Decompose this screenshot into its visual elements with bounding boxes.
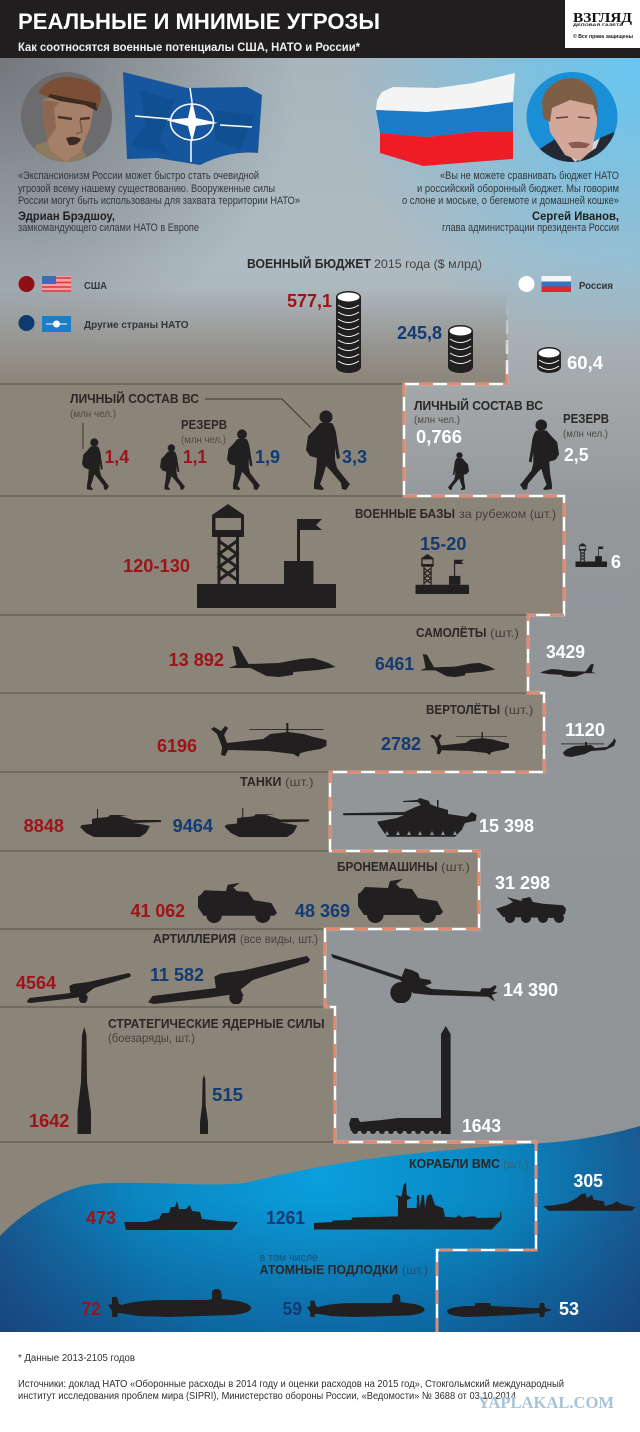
- icon: howitzer Russia: [331, 954, 498, 1003]
- logo: Vzglyad: © Все права защищены: [573, 33, 633, 40]
- icon: ship Russia: [543, 1193, 635, 1211]
- icon: missile NATO: [200, 1075, 208, 1134]
- heading: ships: (шт.): [503, 1157, 529, 1171]
- value: 0,766: 0,766: [416, 427, 462, 447]
- value: 41 062: 41 062: [131, 901, 185, 921]
- quote: Ivanov: [402, 170, 619, 234]
- value: 3429: 3429: [546, 642, 585, 662]
- icon: ship USA: [124, 1201, 238, 1230]
- icon: helicopter USA: [211, 723, 326, 757]
- value: 1,4: 1,4: [104, 447, 129, 467]
- heading: nuclear: СТРАТЕГИЧЕСКИЕ ЯДЕРНЫЕ СИЛЫ: [108, 1017, 324, 1031]
- quote: Bradshaw: Эдриан Брэдшоу,: [18, 209, 115, 223]
- value: 515: 515: [212, 1085, 243, 1105]
- heading: aircraft: САМОЛЁТЫ: [416, 625, 486, 640]
- value: 48 369: 48 369: [295, 901, 350, 921]
- heading: armored vehicles: (шт.): [441, 860, 470, 874]
- heading: Russia reserve: [563, 412, 609, 440]
- heading: submarines: АТОМНЫЕ ПОДЛОДКИ: [260, 1263, 398, 1277]
- icon: base USA: [197, 504, 336, 608]
- value: 1,9: 1,9: [255, 447, 280, 467]
- icon: helicopter NATO: [430, 732, 509, 755]
- value: 13 892: 13 892: [168, 650, 224, 670]
- heading: nuclear: (боезаряды, шт.): [108, 1031, 195, 1045]
- heading: military budget: ВОЕННЫЙ БЮДЖЕТ: [247, 256, 371, 271]
- icon: soldier NATO personnel: [306, 410, 350, 490]
- heading: Russia personnel: [414, 398, 543, 426]
- water: [0, 1126, 640, 1332]
- panel: navy ships: [86, 1157, 635, 1230]
- panel: helicopters: [157, 702, 616, 757]
- value: 59: 59: [282, 1299, 302, 1319]
- value: 1643: 1643: [462, 1116, 501, 1136]
- legend: USA: [18, 276, 107, 292]
- icon: soldier NATO reserve: [227, 429, 260, 490]
- panel: military bases: [123, 504, 621, 608]
- heading: bases: ВОЕННЫЕ БАЗЫ: [355, 507, 455, 521]
- heading: personnel: [70, 391, 199, 420]
- value: 14 390: 14 390: [503, 980, 558, 1000]
- heading: bases: [355, 507, 556, 521]
- panel: armored vehicles: [131, 860, 566, 923]
- value: 72: 72: [82, 1299, 101, 1319]
- value: 2,5: 2,5: [564, 445, 588, 465]
- icon: howitzer NATO: [148, 956, 310, 1004]
- panel: strategic nuclear forces: [29, 1017, 501, 1136]
- heading: reserve: РЕЗЕРВ: [181, 418, 227, 432]
- value: 11 582: 11 582: [150, 965, 204, 985]
- icon: soldier USA reserve: [160, 444, 185, 490]
- heading: reserve: (млн чел.): [181, 434, 226, 446]
- flag: Russia: [376, 73, 515, 166]
- heading: Russia reserve: (млн чел.): [563, 428, 608, 440]
- leader lines: [83, 399, 311, 449]
- icon: howitzer USA: [26, 973, 131, 1003]
- sources: [18, 1378, 564, 1402]
- heading: military budget: [247, 256, 482, 271]
- icon: soldier Russia personnel: [448, 452, 469, 490]
- icon: base Russia: [576, 543, 607, 567]
- panel: artillery: [16, 932, 558, 1004]
- quote: Bradshaw: [18, 170, 300, 234]
- quote: Bradshaw: «Экспансионизм России может быстро стать очевидной: [18, 170, 259, 182]
- footer: [0, 1332, 640, 1432]
- value: 15 398: 15 398: [479, 816, 534, 836]
- heading: artillery: (все виды, шт.): [240, 932, 318, 946]
- portrait: Ivanov: [526, 70, 618, 165]
- heading: artillery: [153, 932, 318, 946]
- heading: bases: за рубежом (шт.): [459, 507, 556, 521]
- heading: artillery: АРТИЛЛЕРИЯ: [153, 932, 236, 946]
- heading: personnel: ЛИЧНЫЙ СОСТАВ ВС: [70, 391, 199, 406]
- heading: helicopters: (шт.): [504, 703, 534, 717]
- value: 4564: 4564: [16, 973, 56, 993]
- heading: armored vehicles: БРОНЕМАШИНЫ: [337, 860, 438, 874]
- value: 3,3: 3,3: [342, 447, 367, 467]
- heading: aircraft: [416, 625, 519, 640]
- icon: submarine USA: [108, 1289, 251, 1317]
- value: 120-130: 120-130: [123, 556, 190, 576]
- heading: tanks: (шт.): [285, 775, 314, 789]
- portrait: Bradshaw: [20, 70, 114, 165]
- icon: submarine Russia: [447, 1303, 552, 1317]
- icon: missile USA: [78, 1027, 91, 1134]
- icon: plane NATO: [420, 654, 495, 677]
- boundary: dashed line over ground and water: [335, 1142, 536, 1332]
- value: 6461: 6461: [375, 654, 414, 674]
- icon: base NATO: [416, 554, 469, 594]
- logo: Vzglyad: ВЗГЛЯД: [573, 11, 632, 26]
- boundary: dashed stepped line: [325, 300, 564, 1142]
- header bar: [0, 0, 640, 58]
- legend: other NATO: Другие страны НАТО: [84, 319, 188, 331]
- value: 245,8: 245,8: [397, 323, 442, 343]
- footnote: * Данные 2013-2105 годов: [18, 1352, 135, 1364]
- value: 6: 6: [611, 552, 621, 572]
- icon: plane USA: [228, 646, 336, 677]
- value: 1,1: 1,1: [183, 447, 207, 467]
- row dividers: [0, 384, 528, 1142]
- quote: Ivanov: Сергей Иванов,: [532, 209, 619, 223]
- value: 1261: 1261: [266, 1208, 305, 1228]
- value: 60,4: 60,4: [567, 353, 603, 373]
- icon: tank NATO: [224, 808, 309, 837]
- heading: helicopters: [426, 702, 534, 717]
- coin stack: NATO: [448, 325, 473, 373]
- heading: personnel: (млн чел.): [70, 408, 116, 420]
- quote: Bradshaw: России могут быть использованы для захвата территории НАТО»: [18, 195, 300, 207]
- legend: Russia: [518, 276, 613, 292]
- legend: Russia: Россия: [579, 280, 613, 292]
- title: РЕАЛЬНЫЕ И МНИМЫЕ УГРОЗЫ: [18, 9, 380, 34]
- heading: tanks: ТАНКИ: [240, 775, 282, 789]
- heading: submarines: в том числе: [260, 1252, 318, 1264]
- value: 31 298: 31 298: [495, 873, 550, 893]
- heading: helicopters: ВЕРТОЛЁТЫ: [426, 702, 500, 717]
- heading: submarines: (шт.): [402, 1263, 428, 1277]
- legend: other NATO: [18, 315, 188, 332]
- value: 1642: 1642: [29, 1111, 69, 1131]
- value: 53: 53: [559, 1299, 579, 1319]
- icon: tank Russia: [343, 798, 477, 837]
- value: 473: 473: [86, 1208, 116, 1228]
- value: 6196: 6196: [157, 736, 197, 756]
- logo: Vzglyad: ДЕЛОВАЯ ГАЗЕТА: [573, 23, 624, 27]
- coin stack: USA: [336, 291, 361, 373]
- value: 15-20: 15-20: [420, 534, 466, 554]
- panel: military budget: [247, 256, 603, 373]
- heading: tanks: [240, 775, 314, 789]
- value: 1120: 1120: [565, 720, 605, 740]
- heading: aircraft: (шт.): [490, 626, 519, 640]
- icon: tank USA: [80, 809, 161, 837]
- coin stack: Russia: [537, 347, 561, 373]
- sources: институт исследования проблем мира (SIPRI), Министерство обороны России, «Ведомости» № 3688 от 03.10.2014: [18, 1390, 516, 1402]
- panel: tanks: [24, 775, 534, 837]
- icon: helicopter Russia: [561, 738, 616, 757]
- panel: aircraft: [168, 625, 596, 677]
- icon: soldier Russia reserve: [520, 419, 559, 490]
- heading: reserve: [181, 418, 227, 446]
- heading: military budget: 2015 года ($ млрд): [374, 257, 482, 271]
- heading: submarines: [260, 1252, 428, 1277]
- value: 8848: 8848: [24, 816, 64, 836]
- subtitle: Как соотносятся военные потенциалы США, НАТО и России*: [18, 40, 360, 54]
- icon: soldier USA personnel: [82, 438, 109, 490]
- heading: Russia personnel: (млн чел.): [414, 414, 460, 426]
- value: 2782: 2782: [381, 734, 421, 754]
- heading: nuclear: [108, 1017, 324, 1045]
- icon: ship NATO: [314, 1182, 502, 1230]
- icon: submarine NATO: [307, 1294, 424, 1317]
- sources: Источники: доклад НАТО «Оборонные расходы в 2014 году и оценки расходов на 2015 год», Стокгольмский международный: [18, 1378, 564, 1390]
- icon: armored car NATO: [358, 879, 443, 923]
- quote: Bradshaw: замкомандующего силами НАТО в Европе: [18, 222, 199, 234]
- watermark: YAPLAKAL.COM: [478, 1393, 614, 1412]
- panel: personnel: [70, 391, 609, 490]
- heading: ships: КОРАБЛИ ВМС: [409, 1157, 500, 1171]
- legend: USA: США: [84, 280, 107, 292]
- flag: NATO: [123, 72, 262, 165]
- icon: missile launcher Russia: [349, 1026, 451, 1134]
- value: 9464: 9464: [173, 816, 213, 836]
- heading: Russia personnel: ЛИЧНЫЙ СОСТАВ ВС: [414, 398, 543, 413]
- icon: plane Russia: [540, 664, 596, 677]
- value: 305: 305: [574, 1171, 603, 1191]
- logo: Vzglyad: [565, 0, 640, 48]
- quote: Bradshaw: угрозой всему нашему существованию. Вооруженные силы: [18, 183, 275, 195]
- icon: armored car USA: [198, 883, 277, 923]
- icon: APC Russia: [496, 897, 566, 923]
- panel: nuclear submarines: [82, 1252, 579, 1319]
- heading: Russia reserve: РЕЗЕРВ: [563, 412, 609, 426]
- value: 577,1: 577,1: [287, 291, 332, 311]
